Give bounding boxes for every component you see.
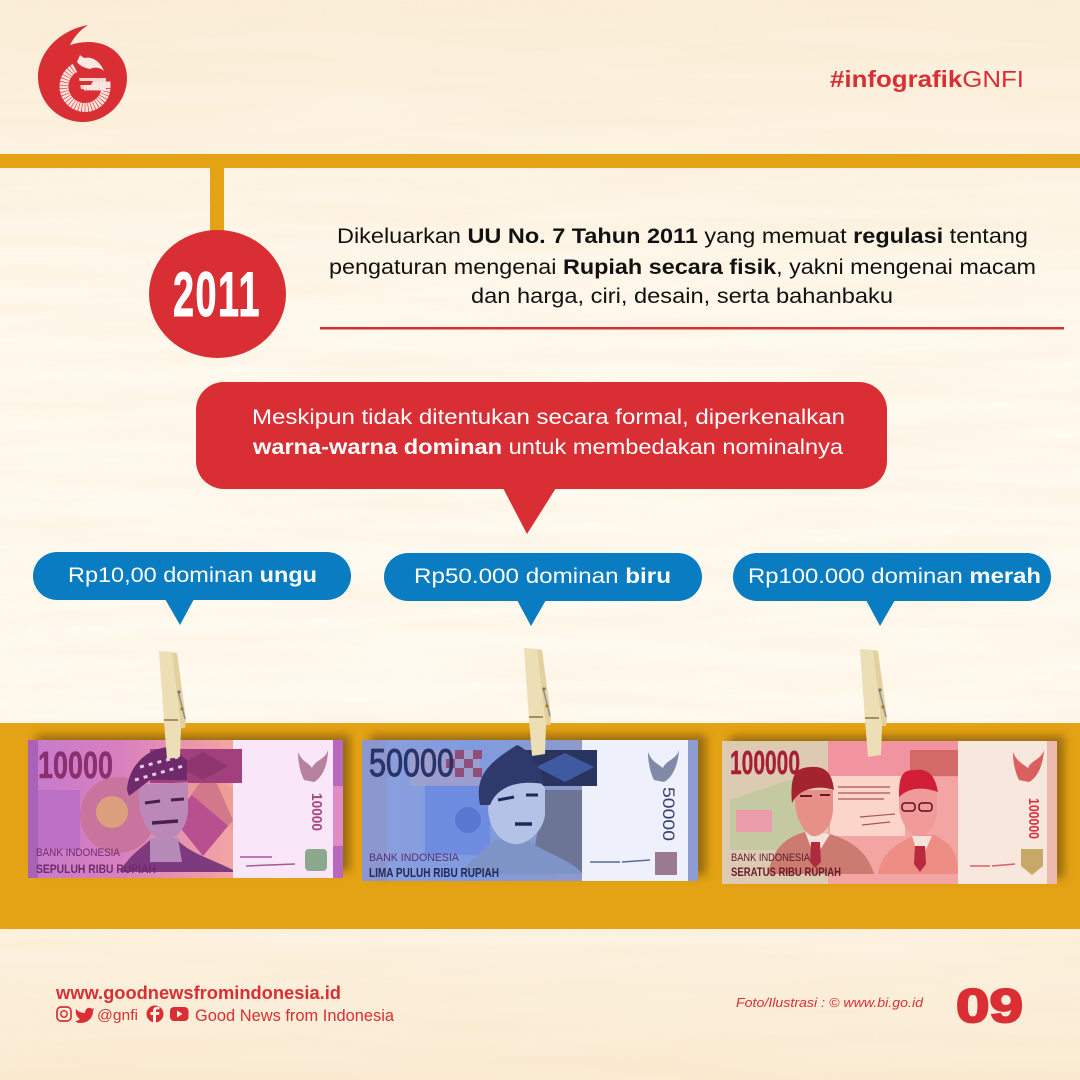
banknote: 10000: BANK INDONESIA: [36, 847, 121, 859]
banknote: 50000: LIMA PULUH RIBU RUPIAH: [369, 865, 499, 880]
banknote: 10000: 10000: [308, 793, 325, 831]
banknote: 50000: 50000: [369, 742, 454, 785]
callout: dominant colours: warna-warna dominan untuk membedakan nominalnya: [252, 436, 843, 459]
banknote shadows: [36, 735, 1064, 878]
banknote: 10000: 10000: [38, 745, 113, 787]
description text: dan harga, ciri, desain, serta bahanbaku: [471, 285, 893, 308]
banknote: 10000: [28, 740, 343, 878]
100000 portrait right: [878, 770, 958, 874]
banknote: 50000: [362, 740, 698, 881]
photo credit: Foto/Ilustrasi : © www.bi.go.id: [736, 995, 924, 1010]
social name: Good News from Indonesia: [195, 1006, 395, 1025]
banknote: 50000: BANK INDONESIA: [369, 852, 460, 864]
clothespin: 100000: [860, 649, 887, 757]
label: Rp10,00 ungu: Rp10,00 dominan ungu: [68, 564, 317, 587]
callout: dominant colours: [196, 382, 887, 534]
banknote: 100000: 100000: [1025, 798, 1042, 839]
timeline bar: [0, 154, 1080, 168]
hashtag: #infografik GNFI: [830, 66, 1024, 92]
banknote: 50000: 50000: [659, 787, 678, 841]
50000 portrait: [462, 745, 582, 874]
footer website: www.goodnewsfromindonesia.id: [55, 983, 341, 1003]
description text: [329, 225, 1036, 308]
label: Rp100.000 merah: Rp100.000 dominan merah: [748, 565, 1041, 588]
description text: pengaturan mengenai Rupiah secara fisik , yakni mengenai macam: [329, 256, 1036, 279]
clothespin: 50000: [524, 648, 551, 756]
50000 garuda: [648, 750, 679, 782]
page number: 09: [956, 979, 1023, 1032]
banknote: 100000: BANK INDONESIA: [731, 852, 811, 864]
banknote: 100000: [722, 741, 1057, 884]
100000 garuda: [1013, 750, 1044, 782]
clothespin: 10000: [159, 651, 186, 759]
banknote: 10000: SEPULUH RIBU RUPIAH: [36, 862, 156, 876]
logo: GNFI red six mark with garuda G: [38, 25, 127, 122]
year badge 2011: [149, 230, 286, 358]
label: Rp50.000 biru: Rp50.000 dominan biru: [414, 565, 671, 588]
banknote: 100000: SERATUS RIBU RUPIAH: [731, 865, 841, 879]
divider rule: [320, 327, 1064, 330]
timeline stem: [210, 168, 224, 238]
callout: dominant colours: Meskipun tidak ditentukan secara formal, diperkenalkan: [252, 406, 845, 429]
social handle: @gnfi: [97, 1007, 138, 1024]
10000 portrait: [120, 747, 233, 872]
banknote: 100000: 100000: [730, 744, 800, 781]
clothesline band: [0, 723, 1080, 929]
description text: Dikeluarkan UU No. 7 Tahun 2011 yang memuat regulasi tentang: [337, 225, 1028, 248]
label: Rp100.000 merah: [733, 553, 1051, 626]
100000 portrait left: [768, 767, 874, 874]
label: Rp50.000 biru: [384, 553, 702, 626]
social icons: [57, 1006, 188, 1023]
10000 garuda: [298, 750, 328, 782]
label: Rp10,00 ungu: [33, 552, 351, 625]
year badge 2011: 2011: [173, 260, 261, 331]
